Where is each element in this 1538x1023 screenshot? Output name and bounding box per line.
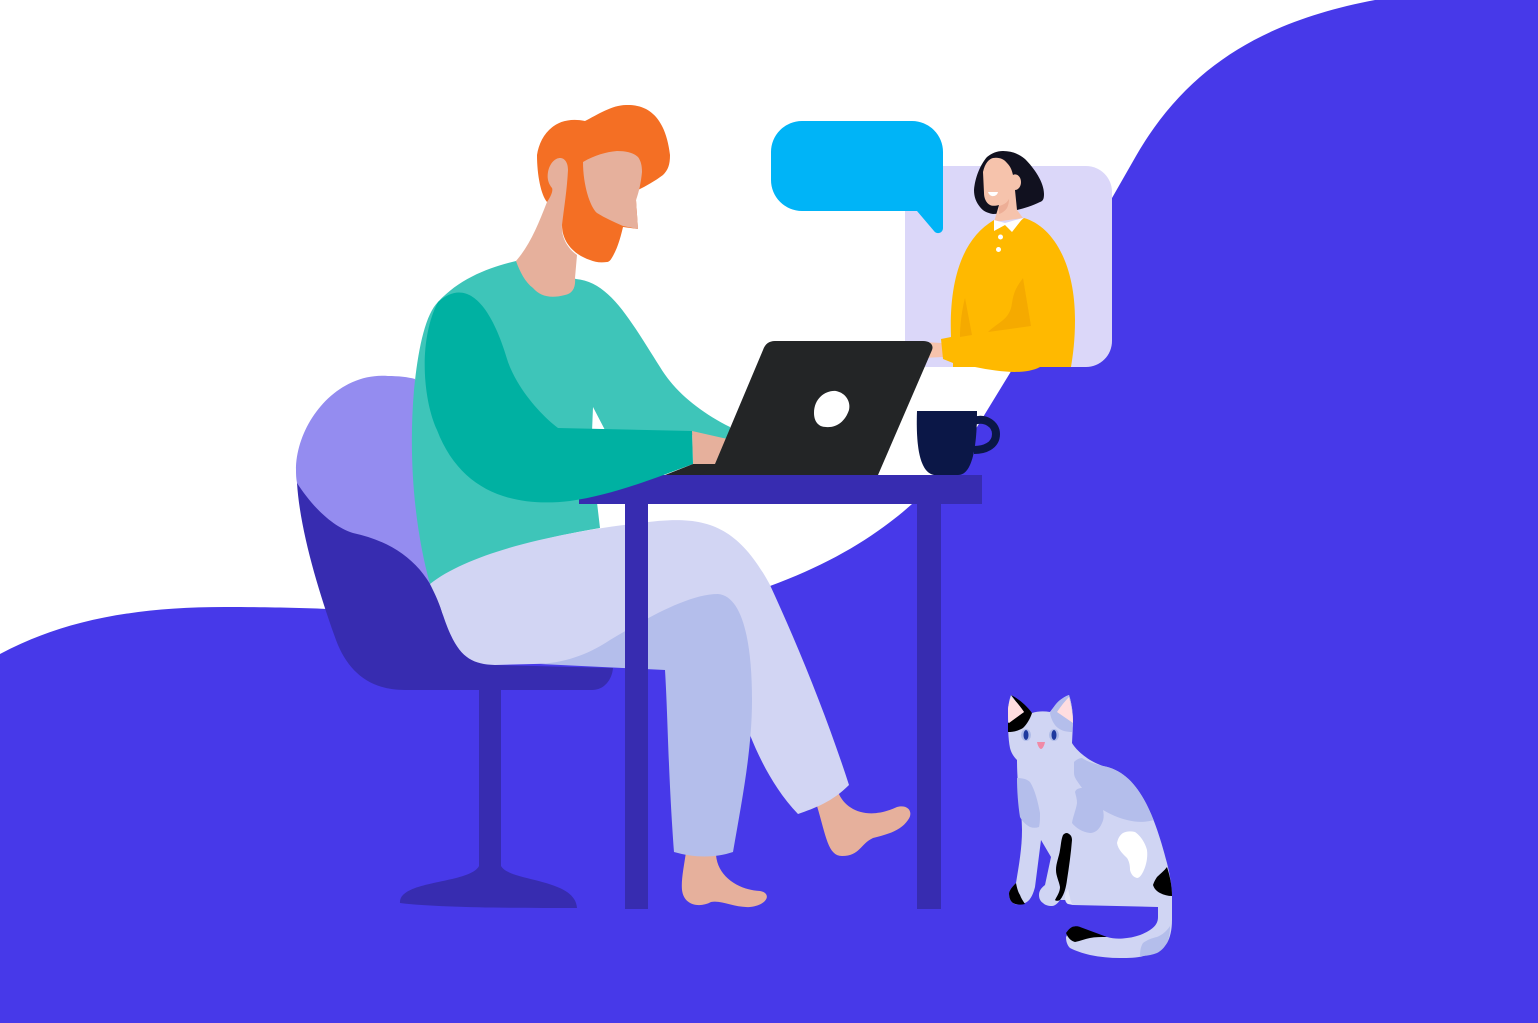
woman sweater (941, 218, 1075, 372)
cat white spot (1117, 831, 1147, 878)
cat body and tail (1008, 695, 1172, 958)
desk leg right (917, 495, 941, 909)
cat nose (1037, 742, 1045, 749)
cat tail tip (1066, 926, 1107, 942)
cat paw highlight (1065, 889, 1073, 905)
desk (579, 475, 982, 909)
woman face and neck (983, 158, 1023, 222)
cat black patches (1008, 695, 1172, 905)
speech bubble (771, 121, 943, 233)
near foot (817, 792, 910, 856)
cat ears inner (1008, 697, 1073, 723)
person trousers back leg (540, 594, 752, 856)
person trousers front leg (430, 520, 849, 814)
hair and beard (537, 105, 670, 262)
chair back (296, 376, 440, 590)
far leg foot (682, 852, 767, 907)
mug (917, 411, 996, 475)
cat patches (1017, 695, 1154, 833)
laptop base (665, 464, 720, 475)
woman neck shadow (999, 199, 1009, 214)
desk top (579, 475, 982, 504)
chair (296, 376, 613, 908)
woman sweater shadow (960, 278, 1031, 337)
face (583, 151, 642, 229)
laptop logo (814, 391, 849, 427)
woman hand (922, 342, 943, 358)
mug body (917, 411, 977, 475)
sweater arm (425, 292, 693, 502)
cat eyes (1024, 730, 1056, 740)
woman (922, 151, 1075, 372)
neck and ear (516, 158, 577, 297)
mug handle (974, 420, 996, 450)
laptop (665, 341, 933, 475)
cat (1008, 695, 1172, 958)
hand on keyboard (692, 431, 740, 464)
sweater body (412, 261, 733, 584)
chair stem and base (400, 690, 577, 908)
woman hair (974, 151, 1044, 214)
woman collar (994, 218, 1023, 232)
woman buttons (996, 234, 1003, 252)
cat tail patch (1140, 926, 1170, 956)
woman smile (988, 192, 998, 196)
cat eye halos (1021, 729, 1059, 741)
laptop lid (700, 341, 933, 475)
chair seat (297, 483, 613, 690)
video call panel (905, 166, 1112, 367)
desk leg left (625, 495, 648, 909)
